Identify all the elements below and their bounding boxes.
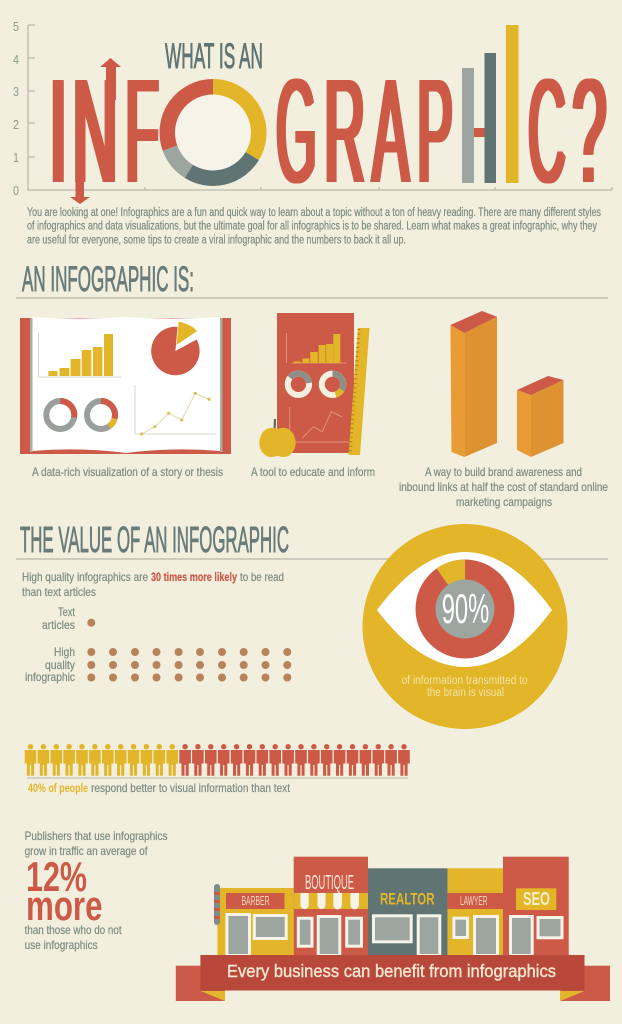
book pie chart bbox=[151, 322, 205, 375]
captions under icons: marketing campaigns bbox=[456, 495, 552, 509]
text: publishers 12 percent more: use infographics bbox=[25, 938, 98, 952]
text: WHAT IS AN bbox=[165, 37, 263, 76]
title word: infographic: P bbox=[415, 49, 450, 214]
shop: barber: BARBER bbox=[242, 893, 270, 908]
bar letter H bbox=[462, 53, 496, 183]
book bar chart bbox=[38, 333, 121, 377]
intro paragraph bbox=[27, 207, 601, 246]
shop: lawyer: LAWYER bbox=[460, 893, 488, 908]
chart axes behind title: 0 bbox=[13, 183, 19, 198]
title word: infographic: I bbox=[46, 49, 64, 214]
shop: realtor: REALTOR bbox=[380, 890, 435, 908]
title word: infographic: A bbox=[370, 49, 407, 214]
arrow: up bbox=[100, 58, 121, 100]
ribbon banner: Every business can benefit from infographics bbox=[227, 961, 556, 981]
text: publishers 12 percent more: Publishers that use infographics bbox=[25, 829, 168, 843]
captions under icons: A tool to educate and inform bbox=[251, 465, 375, 479]
chart axes behind title bbox=[13, 19, 612, 198]
board bar chart bbox=[286, 333, 347, 363]
captions under icons bbox=[32, 465, 608, 509]
text: 40 percent of people: 40% of people bbox=[28, 781, 88, 795]
ribbon banner bbox=[176, 955, 610, 1001]
book donut charts bbox=[46, 401, 115, 429]
icon: tall book stack bbox=[450, 311, 497, 457]
shop: seo: SEO bbox=[523, 889, 550, 909]
chart axes behind title: 3 bbox=[13, 84, 19, 99]
title word: infographic: C bbox=[526, 49, 564, 214]
dot chart labels: articles bbox=[42, 618, 75, 632]
title word: infographic: R bbox=[322, 49, 362, 214]
dot chart labels: Text bbox=[58, 605, 76, 619]
chart axes behind title: 1 bbox=[13, 150, 19, 165]
book line chart bbox=[135, 385, 216, 436]
icon: ruler bbox=[348, 328, 370, 455]
text: THE VALUE OF AN INFOGRAPHIC bbox=[20, 519, 289, 560]
intro paragraph: are useful for everyone, some tips to create a viral infographic and the numbers to back it all up. bbox=[27, 234, 406, 246]
board donut charts bbox=[288, 374, 343, 395]
chart axes behind title: 2 bbox=[13, 117, 19, 132]
icon: apple bbox=[259, 419, 296, 457]
icon: short book stack bbox=[517, 376, 564, 457]
dot chart labels bbox=[25, 605, 76, 684]
board line chart bbox=[290, 407, 349, 442]
text: AN INFOGRAPHIC IS: bbox=[22, 260, 194, 299]
text: publishers 12 percent more: grow in traffic an average of bbox=[25, 844, 148, 858]
title word: infographic: N bbox=[70, 49, 115, 214]
chart axes behind title: 5 bbox=[13, 19, 19, 34]
dot chart bbox=[87, 619, 291, 682]
eye graphic: 90 percent: of information transmitted to bbox=[402, 675, 528, 687]
title word: infographic: G bbox=[274, 49, 315, 214]
storefronts bbox=[214, 857, 569, 956]
text: 30 times more likely bbox=[22, 570, 284, 599]
title word: infographic: F bbox=[123, 49, 156, 214]
icon: chalkboard bbox=[277, 313, 354, 453]
text: 30 times more likely: than text articles bbox=[22, 585, 96, 599]
eye graphic: 90 percent: 90% bbox=[442, 585, 489, 632]
text: 30 times more likely: High quality infographics are bbox=[22, 570, 148, 584]
text: publishers 12 percent more: more bbox=[26, 882, 102, 929]
text: 40 percent of people bbox=[28, 781, 291, 795]
captions under icons: A data-rich visualization of a story or thesis bbox=[32, 465, 223, 479]
arrow: down bbox=[70, 180, 90, 204]
dot chart labels: infographic bbox=[25, 670, 75, 684]
text: publishers 12 percent more bbox=[25, 829, 168, 952]
text: 40 percent of people: respond better to visual information than text bbox=[91, 781, 291, 795]
dot chart labels: quality bbox=[45, 658, 75, 672]
shop: boutique: BOUTIQUE bbox=[305, 872, 354, 894]
shop: boutique bbox=[294, 857, 368, 956]
shop: lawyer bbox=[448, 868, 503, 956]
shop: realtor bbox=[368, 868, 448, 956]
text: 30 times more likely: 30 times more likely bbox=[151, 570, 237, 584]
captions under icons: A way to build brand awareness and bbox=[425, 465, 582, 479]
bar letter I bbox=[506, 25, 518, 183]
eye graphic: 90 percent bbox=[362, 524, 568, 729]
donut letter O bbox=[167, 87, 259, 178]
chart axes behind title: 4 bbox=[13, 52, 19, 67]
shop: barber bbox=[214, 884, 294, 956]
eye graphic: 90 percent: the brain is visual bbox=[427, 687, 504, 699]
people pictogram bbox=[25, 744, 410, 776]
dot chart labels: High bbox=[54, 645, 75, 659]
shop: seo bbox=[503, 857, 569, 956]
title word: infographic: ? bbox=[570, 49, 604, 214]
text: 30 times more likely: to be read bbox=[240, 570, 284, 584]
text: publishers 12 percent more: than those who do not bbox=[25, 923, 122, 937]
title word: infographic bbox=[46, 49, 607, 214]
text: publishers 12 percent more: 12% bbox=[26, 853, 87, 900]
icon: open book bbox=[20, 317, 231, 454]
